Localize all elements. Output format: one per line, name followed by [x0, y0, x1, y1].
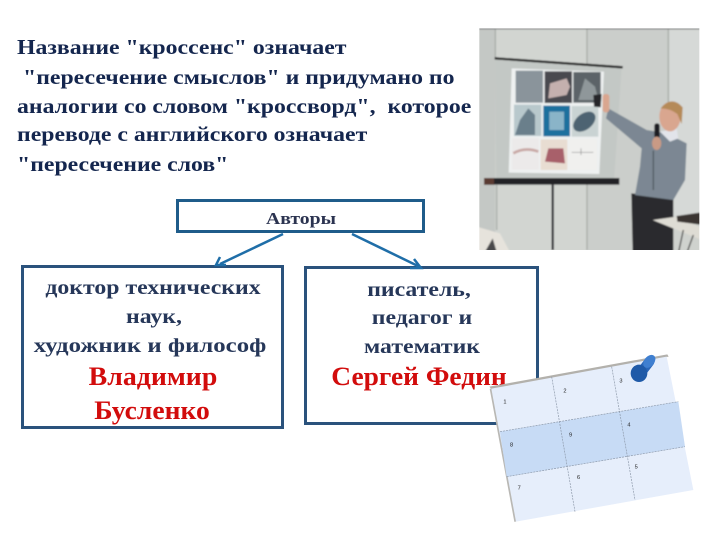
description: writer, teacher, mathematician — [364, 279, 480, 358]
description: doctor of technical sciences: наук, — [126, 306, 181, 328]
intro text block: переводе с английского означает — [17, 122, 367, 146]
description: doctor of technical sciences: доктор технических — [45, 277, 260, 299]
name: Vladimir Buslenko — [88, 362, 217, 424]
box: authors heading: Авторы — [265, 209, 336, 228]
description: doctor of technical sciences — [34, 277, 266, 356]
illustration: crossword sheet with pin: 4 — [627, 422, 630, 428]
illustration: crossword sheet with pin: 7 — [518, 486, 521, 492]
illustration: crossword sheet with pin: 1 — [503, 399, 506, 405]
description: writer, teacher, mathematician: математик — [364, 336, 480, 358]
intro text block: "пересечение слов" — [17, 152, 228, 176]
description: doctor of technical sciences: художник и философ — [34, 334, 266, 356]
description: writer, teacher, mathematician: педагог и — [372, 307, 472, 329]
icon: push pin — [631, 353, 658, 382]
panel: Vladimir Buslenko — [21, 265, 284, 429]
intro text block — [17, 34, 471, 176]
intro text block: "пересечение смыслов" и придумано по — [23, 64, 455, 88]
name: Vladimir Buslenko: Бусленко — [95, 396, 210, 424]
illustration: crossword sheet with pin — [490, 354, 694, 522]
intro text block: Название "кроссенс" означает — [17, 34, 346, 58]
arrow: to left author — [214, 233, 284, 266]
illustration: crossword sheet with pin: 3 — [619, 378, 622, 384]
arrow: to right author — [352, 233, 424, 270]
intro text block: аналогии со словом "кроссворд", которое — [17, 94, 471, 118]
illustration: crossword sheet with pin: 8 — [510, 443, 513, 449]
illustration: crossword sheet with pin: 6 — [577, 475, 580, 481]
box: authors heading — [176, 199, 425, 233]
photo: presenter at a projection screen — [479, 28, 700, 250]
panel: Sergey Fedin — [304, 266, 539, 425]
name: Vladimir Buslenko: Владимир — [88, 362, 217, 391]
name: Sergey Fedin: Сергей Федин — [331, 362, 506, 391]
description: writer, teacher, mathematician: писатель, — [367, 279, 471, 301]
illustration: crossword sheet with pin: 9 — [569, 433, 572, 439]
illustration: crossword sheet with pin: 2 — [563, 389, 566, 395]
illustration: crossword sheet with pin: 5 — [635, 465, 638, 471]
